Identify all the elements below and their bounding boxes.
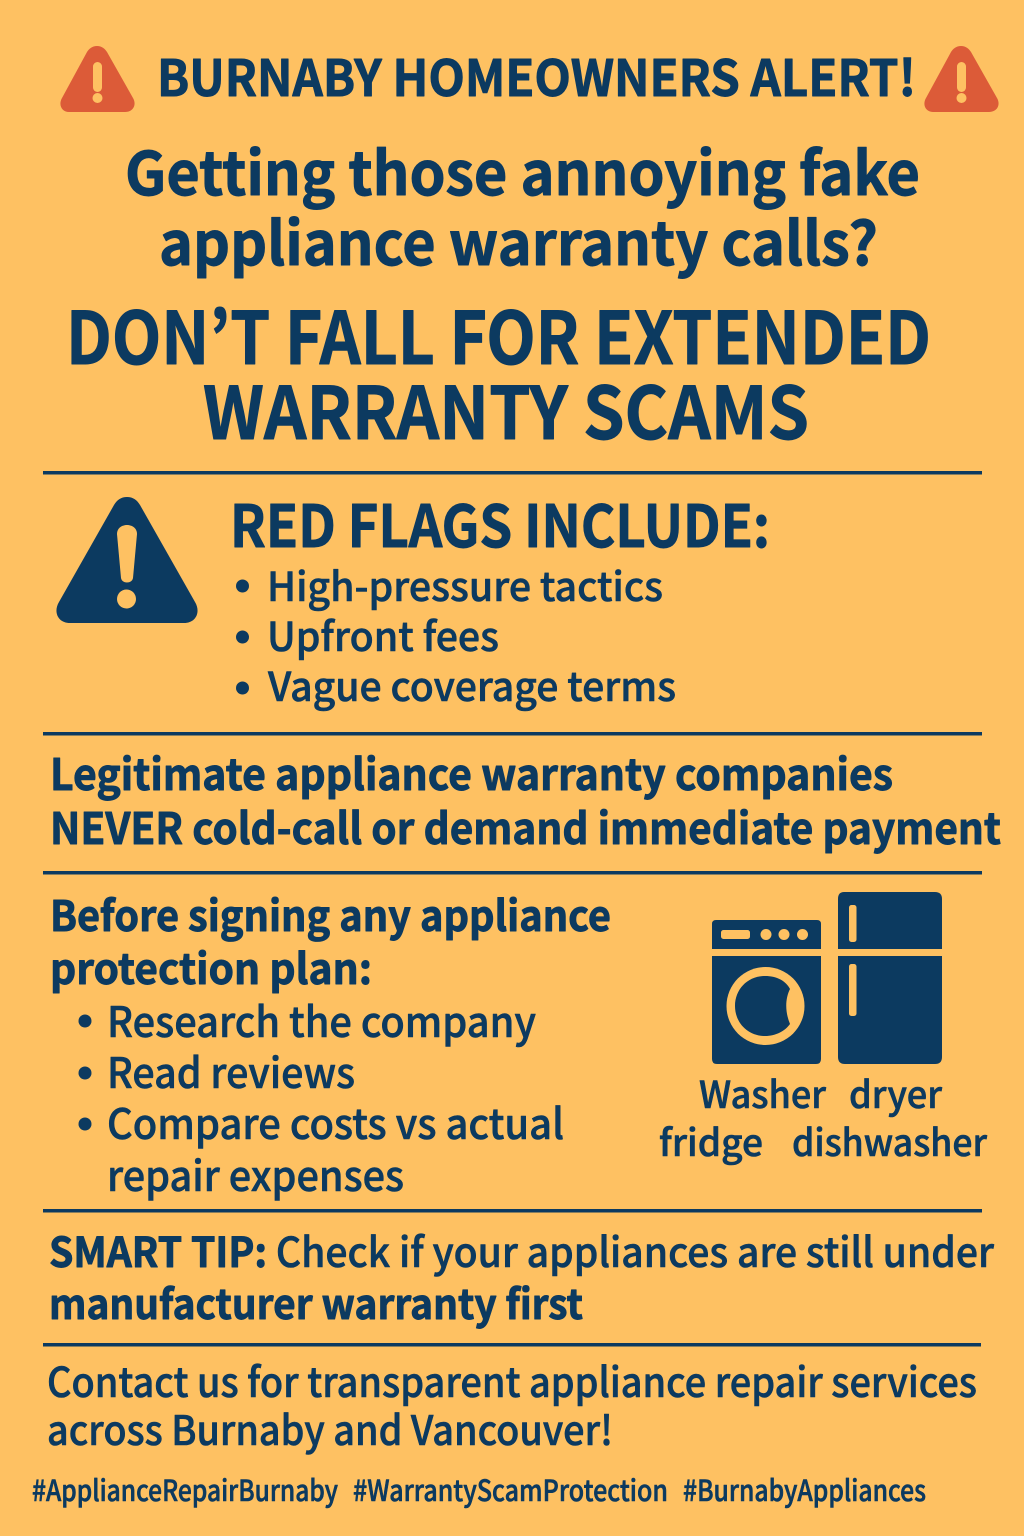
contact call to action xyxy=(47,1349,977,1457)
main headline xyxy=(66,280,931,460)
main headline: DON’T FALL FOR EXTENDED xyxy=(66,280,931,385)
checklist items: repair expenses xyxy=(107,1143,404,1204)
smart tip: manufacturer warranty first xyxy=(49,1271,583,1331)
smart tip xyxy=(49,1219,994,1331)
panel: before signing checklist xyxy=(50,883,611,1204)
icon: left red warning triangle xyxy=(60,46,135,112)
subtitle question xyxy=(125,126,920,283)
red flags list: High-pressure tactics xyxy=(267,555,663,613)
hashtags: #WarrantyScamProtection xyxy=(353,1468,668,1510)
statement: legitimate companies xyxy=(50,741,1001,857)
main headline: WARRANTY SCAMS xyxy=(203,355,809,460)
panel: red flags xyxy=(230,480,770,713)
statement: legitimate companies: Legitimate appliance warranty companies xyxy=(50,741,893,803)
checklist heading: protection plan: xyxy=(50,936,372,997)
subtitle question: Getting those annoying fake xyxy=(125,126,920,213)
smart tip: SMART TIP: Check if your appliances are still under xyxy=(49,1219,994,1279)
icon: washing machine xyxy=(712,920,821,1064)
icon: refrigerator xyxy=(838,892,942,1064)
checklist items: Read reviews xyxy=(107,1040,355,1101)
checklist items xyxy=(78,989,564,1204)
subtitle question: appliance warranty calls? xyxy=(159,196,878,283)
contact call to action: across Burnaby and Vancouver! xyxy=(47,1397,613,1457)
appliance labels: dishwasher xyxy=(792,1113,988,1167)
checklist heading xyxy=(50,883,611,997)
appliance labels: Washer xyxy=(699,1065,827,1119)
checklist heading: Before signing any appliance xyxy=(50,883,611,944)
hashtags: #BurnabyAppliances xyxy=(683,1468,926,1510)
contact call to action: Contact us for transparent appliance repair services xyxy=(47,1349,977,1409)
red flags heading: RED FLAGS INCLUDE: xyxy=(230,480,770,564)
title: alert heading: BURNABY HOMEOWNERS ALERT! xyxy=(157,39,916,111)
appliance labels: fridge xyxy=(659,1113,763,1167)
checklist items: Research the company xyxy=(107,989,536,1050)
hashtags: #ApplianceRepairBurnaby xyxy=(32,1468,338,1510)
appliance labels: dryer xyxy=(849,1065,943,1119)
red flags list: Upfront fees xyxy=(267,605,499,663)
red flags list xyxy=(236,555,676,713)
red flags list: Vague coverage terms xyxy=(267,655,676,713)
icon: navy warning triangle xyxy=(56,497,198,623)
appliance labels xyxy=(659,1065,988,1167)
checklist items: Compare costs vs actual xyxy=(107,1091,564,1152)
hashtags xyxy=(32,1468,926,1510)
icon: right red warning triangle xyxy=(924,46,999,112)
